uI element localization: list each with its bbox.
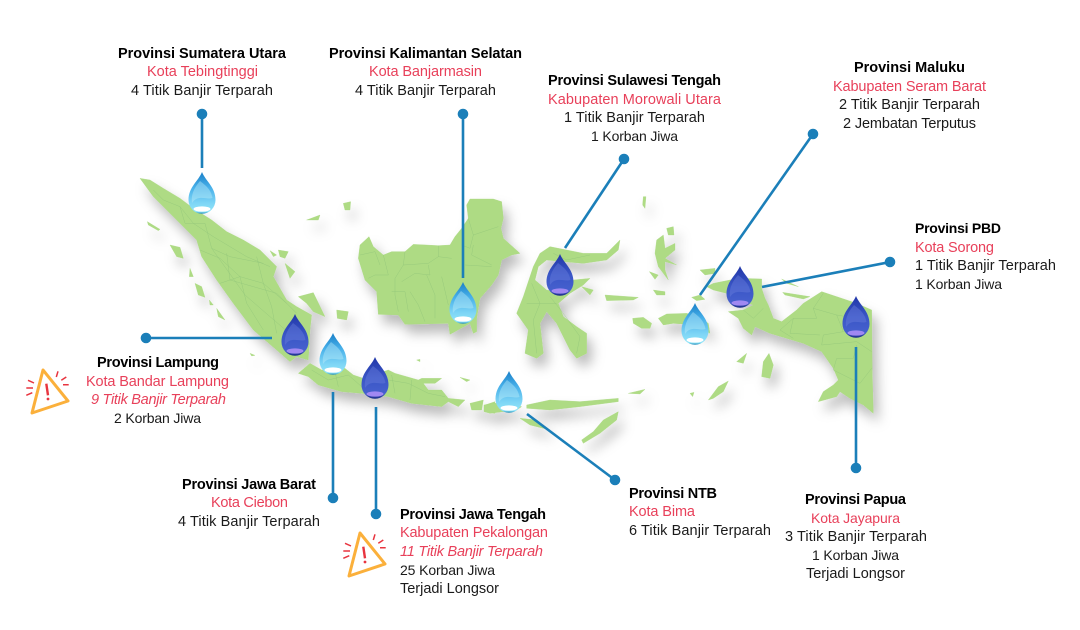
label: PBD: 1 Korban Jiwa bbox=[915, 276, 1002, 292]
label: Maluku: Kabupaten Seram Barat bbox=[833, 79, 986, 95]
label: PBD: 1 Titik Banjir Terparah bbox=[915, 258, 1056, 274]
connector: Kalimantan Selatan bbox=[459, 110, 467, 278]
label: NTB: 6 Titik Banjir Terparah bbox=[629, 523, 771, 539]
label: Jawa Barat: Kota Ciebon bbox=[211, 495, 288, 511]
icon: drop Sulawesi Tengah bbox=[546, 254, 574, 296]
label: Maluku bbox=[833, 60, 986, 132]
label: Kalimantan Selatan bbox=[329, 46, 522, 99]
label: Sumatera Utara bbox=[118, 46, 287, 99]
label: Lampung: 2 Korban Jiwa bbox=[114, 410, 201, 426]
label: PBD: Kota Sorong bbox=[915, 240, 994, 256]
label: Jawa Barat bbox=[178, 477, 320, 530]
label: Kalimantan Selatan: 4 Titik Banjir Terparah bbox=[355, 83, 496, 99]
Papua bbox=[690, 278, 873, 413]
connector: Lampung bbox=[142, 334, 272, 342]
label: NTB: Provinsi NTB bbox=[629, 486, 717, 502]
label: Papua: Terjadi Longsor bbox=[806, 566, 905, 582]
label: Jawa Tengah: 25 Korban Jiwa bbox=[400, 562, 495, 578]
Sumatra and western islands bbox=[140, 178, 351, 362]
connector lines bbox=[142, 110, 894, 518]
icon: drop Papua bbox=[842, 296, 870, 338]
icon: drop Lampung bbox=[282, 314, 308, 356]
label: Jawa Tengah: Provinsi Jawa Tengah bbox=[400, 507, 546, 523]
label: NTB bbox=[629, 486, 771, 539]
connector: Jawa Barat bbox=[329, 392, 337, 502]
label: PBD bbox=[915, 220, 1056, 292]
label: Papua: Provinsi Papua bbox=[805, 492, 907, 508]
icon: drop Jawa Tengah bbox=[362, 357, 388, 399]
label: Lampung: Kota Bandar Lampung bbox=[86, 374, 229, 390]
label: Sumatera Utara: 4 Titik Banjir Terparah bbox=[131, 83, 273, 99]
label: Kalimantan Selatan: Provinsi Kalimantan Selatan bbox=[329, 46, 522, 62]
label: PBD: Provinsi PBD bbox=[915, 220, 1001, 236]
Java, Bali and Lombok bbox=[298, 359, 495, 413]
label: Lampung bbox=[86, 355, 229, 426]
icon: drop Jawa Barat bbox=[320, 333, 346, 375]
connector: PBD bbox=[762, 258, 894, 287]
connector: Sumatera Utara bbox=[198, 110, 206, 168]
connector: Jawa Tengah bbox=[372, 407, 380, 518]
icon: warning Lampung bbox=[26, 370, 69, 413]
label: Maluku: 2 Jembatan Terputus bbox=[843, 116, 976, 132]
connector: Papua bbox=[852, 347, 860, 472]
label: Lampung: Provinsi Lampung bbox=[97, 355, 219, 371]
label: Maluku: 2 Titik Banjir Terparah bbox=[839, 97, 980, 113]
icon: drop NTB bbox=[496, 371, 522, 413]
label: NTB: Kota Bima bbox=[629, 504, 696, 520]
label: Sulawesi Tengah: Provinsi Sulawesi Tengah bbox=[548, 73, 721, 89]
label: Maluku: Provinsi Maluku bbox=[854, 60, 965, 76]
label: Papua: 1 Korban Jiwa bbox=[812, 547, 899, 563]
connector: NTB bbox=[527, 414, 619, 484]
label: Sumatera Utara: Kota Tebingtinggi bbox=[147, 64, 258, 80]
label: Sumatera Utara: Provinsi Sumatera Utara bbox=[118, 46, 287, 62]
label: Jawa Tengah: 11 Titik Banjir Terparah bbox=[400, 544, 543, 560]
label: Jawa Barat: Provinsi Jawa Barat bbox=[182, 477, 316, 493]
label: Jawa Tengah bbox=[400, 507, 548, 597]
label: Jawa Tengah: Kabupaten Pekalongan bbox=[400, 525, 548, 541]
label: Jawa Barat: 4 Titik Banjir Terparah bbox=[178, 514, 320, 530]
Kalimantan bbox=[358, 199, 520, 334]
label: Kalimantan Selatan: Kota Banjarmasin bbox=[369, 64, 482, 80]
label: Lampung: 9 Titik Banjir Terparah bbox=[91, 392, 226, 408]
connector: Maluku bbox=[700, 130, 817, 295]
map of Indonesia bbox=[140, 178, 873, 443]
label: Sulawesi Tengah: 1 Korban Jiwa bbox=[591, 128, 678, 144]
label: Papua: Kota Jayapura bbox=[811, 510, 900, 526]
Sulawesi and Lesser Sunda bbox=[484, 197, 646, 443]
icon: warning Jawa Tengah bbox=[343, 533, 386, 576]
icon: drop Maluku bbox=[682, 303, 708, 345]
label: Sulawesi Tengah: Kabupaten Morowali Utara bbox=[548, 92, 722, 108]
label: Jawa Tengah: Terjadi Longsor bbox=[400, 581, 499, 597]
icon: drop PBD bbox=[726, 266, 754, 308]
connector: Sulawesi Tengah bbox=[565, 155, 628, 248]
Maluku islands bbox=[633, 227, 715, 333]
label: Papua: 3 Titik Banjir Terparah bbox=[785, 529, 927, 545]
label: Sulawesi Tengah bbox=[548, 73, 722, 144]
icon: drop Sumatera Utara bbox=[188, 172, 216, 214]
label: Papua bbox=[785, 492, 927, 582]
icon: drop Kalimantan Selatan bbox=[450, 282, 476, 324]
label: Sulawesi Tengah: 1 Titik Banjir Terparah bbox=[564, 110, 705, 126]
